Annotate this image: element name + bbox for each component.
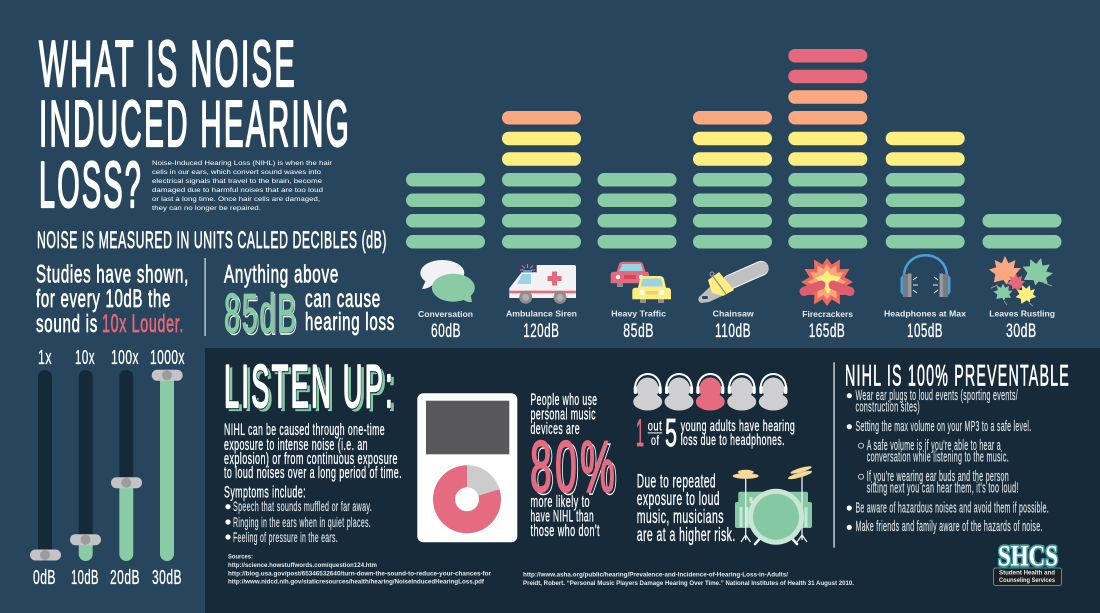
sources right (523, 572, 854, 587)
slider labels: multiplier (38, 347, 185, 369)
chart labels: Firecrackers (802, 309, 853, 319)
heading: listen up (224, 353, 398, 423)
bars: headphones at max (886, 132, 965, 248)
stat: 80 percent: those who don't (530, 521, 600, 540)
text: musicians at risk: are at a higher risk. (637, 525, 736, 546)
sources left: http://blog.usa.gov/post/65346532640/turn-down-the-sound-to-reduce-your-chances-for (228, 571, 492, 577)
panel: listen up: LISTEN UP: (227, 356, 398, 423)
text: studies have shown: for every 10dB the (36, 285, 171, 313)
bars: leaves rustling (982, 214, 1062, 248)
intro text: Noise-Induced Hearing Loss (NIHL) is when the hair (152, 160, 333, 167)
slider chart (30, 347, 185, 589)
chart labels: 30dB (1006, 321, 1037, 342)
chart labels: Ambulance Siren (506, 308, 577, 318)
text: anything above 85dB: Anything above (224, 260, 339, 288)
text: musicians at risk: exposure to loud (637, 489, 720, 510)
stat: 1 out of 5: 5 (665, 412, 677, 455)
stat: 80 percent: have NIHL than (530, 507, 594, 526)
person 4 (727, 374, 756, 411)
person 5 (759, 374, 788, 411)
text: symptoms list: Symptoms include: (224, 482, 306, 502)
text: NIHL causes (224, 420, 402, 482)
slider labels: decibels: 20dB (110, 567, 140, 589)
intro text: or last a long time. Once hair cells are damaged, (152, 196, 320, 203)
icon: leaves (989, 254, 1056, 306)
bars: ambulance siren (502, 111, 581, 248)
stat: 80 percent: devices are (530, 419, 580, 438)
logo: SHCS: SHCS (998, 540, 1058, 573)
person 1 (633, 374, 662, 411)
intro text: electrical signals that travel to the brain, become (152, 178, 322, 185)
slider labels: decibels: 10dB (71, 567, 99, 589)
slider: 20dB (111, 370, 142, 561)
stat: 80 percent: People who use (530, 390, 598, 409)
chart labels: 120dB (523, 321, 559, 342)
slider labels: multiplier: 10x (75, 347, 95, 369)
slider: 30dB (152, 370, 183, 561)
person 2 (664, 374, 694, 411)
icon: music player (417, 393, 517, 542)
stat: 80 percent: 80% (530, 428, 618, 508)
icon: traffic cars (611, 262, 671, 303)
slider labels: multiplier: 1000x (150, 347, 185, 369)
bars: heavy traffic (598, 173, 676, 248)
logo: SHCS: SHCS (998, 540, 1058, 573)
panel: listen up (205, 348, 1100, 613)
stat: 1 out of 5 (636, 412, 795, 455)
bars: chainsaw (693, 111, 772, 248)
intro text: cells in our ears, which convert sound waves into (152, 169, 321, 176)
stat: 1 out of 5: 1 (636, 412, 644, 455)
stat: 80 percent: 80% (532, 430, 620, 510)
sources left: http://science.howstuffwords.com/question124.htm (228, 563, 377, 569)
sources left: Sources: (228, 555, 253, 561)
text: anything above 85dB (224, 260, 395, 346)
title: LOSS? (39, 148, 143, 221)
title: WHAT IS NOISE (39, 27, 297, 100)
person 3: highlighted (696, 374, 725, 411)
text: symptoms list: Feeling of pressure in the ears. (233, 529, 338, 545)
slider labels: decibels (33, 567, 182, 589)
slider: 0dB (30, 370, 61, 561)
sources right: Preidt, Robert. “Personal Music Players Damage Hearing Over Time.” National Institutes of Health 31 August 2010. (523, 581, 854, 587)
logo: SHCS: Student Health and (999, 570, 1055, 576)
chart labels: 110dB (715, 321, 751, 342)
chart labels: Headphones at Max (884, 308, 966, 318)
slider labels: decibels: 30dB (152, 567, 182, 589)
text: anything above 85dB: 85dB (226, 284, 299, 346)
chart labels: 85dB (623, 321, 654, 342)
equalizer bar chart (406, 49, 1062, 248)
bars: firecrackers (788, 49, 867, 248)
text: anything above 85dB: can cause (305, 285, 381, 313)
text: symptoms list (224, 482, 372, 545)
slider labels: multiplier: 1x (38, 347, 52, 369)
stat: 1 out of 5: loss due to headphones. (681, 432, 785, 449)
text: NIHL causes: to loud noises over a long period of time. (224, 463, 402, 482)
chart labels: Conversation (418, 309, 473, 319)
stat: 1 out of 5: young adults have hearing (681, 418, 795, 435)
stat: 1 out of 5: out (648, 418, 662, 434)
slider labels: multiplier: 100x (111, 347, 139, 369)
text: studies have shown (36, 260, 189, 338)
text: musicians at risk: music, musicians (637, 507, 724, 528)
text: studies have shown: Studies have shown, (36, 260, 189, 288)
bars: conversation (406, 173, 485, 248)
chart labels (418, 308, 1055, 342)
icon: conversation (420, 260, 475, 302)
title (39, 27, 351, 221)
chart labels: 105dB (907, 321, 943, 342)
stat: 80 percent: personal music (530, 404, 596, 424)
slider labels: decibels: 0dB (33, 567, 56, 589)
panel: listen up: LISTEN UP: (224, 353, 395, 420)
chart labels: 60dB (431, 321, 461, 342)
text: musicians at risk (637, 472, 736, 546)
stat: 80 percent: more likely to (530, 492, 590, 511)
chart labels: 165dB (809, 321, 845, 342)
text: studies have shown: sound is (36, 310, 98, 338)
text: symptoms list: Ringing in the ears when in quiet places. (233, 514, 371, 530)
text: symptoms list: Speech that sounds muffled or far away. (233, 498, 372, 514)
chart labels: Heavy Traffic (611, 308, 666, 318)
icon: chainsaw (698, 268, 762, 303)
sources left (228, 555, 492, 586)
text: anything above 85dB: 85dB (224, 282, 298, 344)
icon: five people with headphones (633, 374, 788, 411)
logo: SHCS: Counseling Services (999, 577, 1056, 584)
sources right: http://www.asha.org/public/hearing/Prevalence-and-Incidence-of-Hearing-Loss-in-Adults/ (523, 572, 788, 578)
list: prevention tips (847, 388, 1049, 535)
text: NIHL causes: explosion) or from continuous exposure (224, 449, 398, 468)
sources left: http://www.nidcd.nih.gov/staticresources/health/hearing/NoiseInducedHearingLoss.pdf (228, 580, 485, 586)
text: NOISE IS MEASURED IN UNITS CALLED DECIBLES (dB) (37, 227, 387, 254)
text: musicians at risk: Due to repeated (637, 472, 716, 493)
icon: ambulance (509, 264, 576, 304)
list: prevention tips: construction sites) (856, 400, 920, 416)
text: NIHL causes: NIHL can be caused through one-time (224, 420, 385, 439)
icon: headphones (901, 255, 950, 297)
panel: listen up: LISTEN UP: (224, 353, 395, 420)
text: INDUCED HEARING (39, 87, 351, 160)
text: NIHL causes: exposure to intense noise (i.e. an (224, 435, 368, 454)
intro text: they can no longer be repaired. (152, 205, 261, 212)
logo: SHCS (994, 540, 1062, 586)
intro text (152, 160, 333, 212)
slider: 10dB (70, 370, 101, 561)
chart labels: Chainsaw (713, 308, 754, 318)
stat: 1 out of 5: of (651, 432, 660, 448)
icon: drum kit (733, 465, 813, 545)
text: studies have shown: 10x Louder. (102, 310, 184, 338)
chart labels: Leaves Rustling (989, 308, 1055, 318)
icon: firecrackers (801, 258, 853, 306)
text: anything above 85dB: hearing loss (305, 308, 395, 336)
stat: 80 percent (530, 390, 620, 540)
intro text: damaged due to harmful noises that are too loud (152, 187, 323, 194)
